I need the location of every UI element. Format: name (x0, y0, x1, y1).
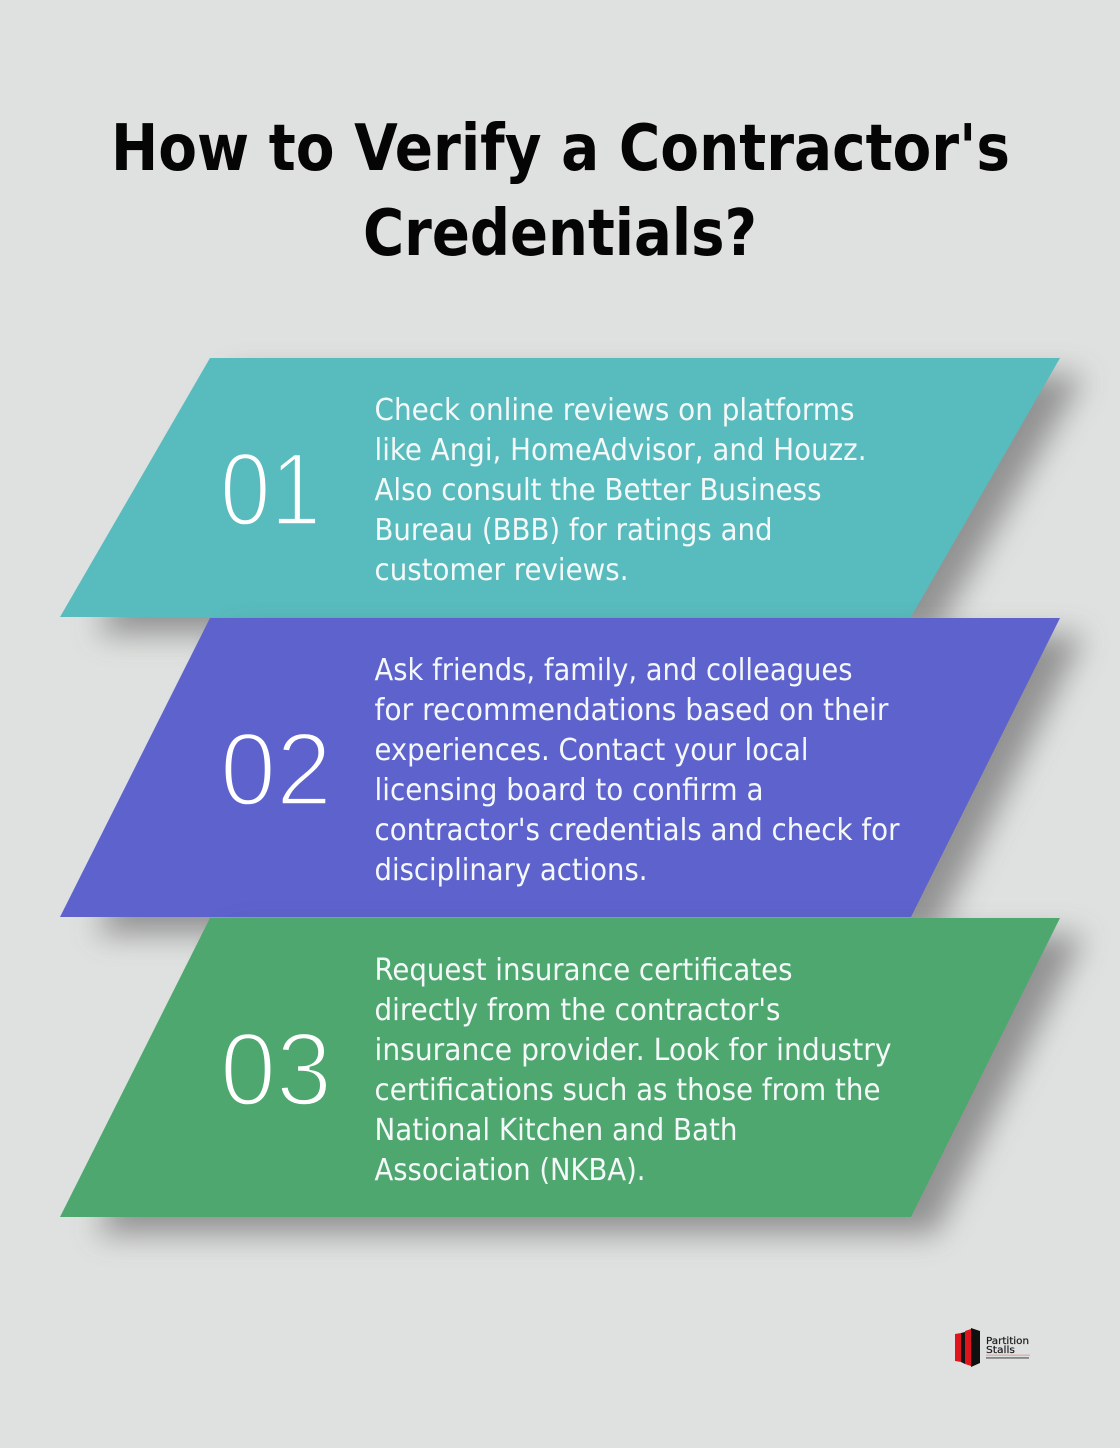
logo icon (955, 1328, 980, 1367)
step 02 text: Ask friends, family, and colleagues (374, 653, 852, 688)
logo wordmark: Partition (986, 1336, 1029, 1347)
title: Credentials? (363, 197, 757, 271)
step 03 text: directly from the contractor's (374, 993, 780, 1028)
step 02 text: experiences. Contact your local (374, 733, 808, 768)
step 01 text: Also consult the Better Business (374, 473, 822, 508)
logo wordmark (986, 1336, 1029, 1356)
step number 02: 02 (220, 712, 332, 828)
step 03 text: insurance provider. Look for industry (374, 1033, 892, 1068)
step 03 text: certifications such as those from the (374, 1073, 880, 1108)
title: How to Verify a Contractor's (111, 112, 1010, 186)
step 03 text: Request insurance certificates (374, 953, 792, 988)
step 03 text: National Kitchen and Bath (374, 1113, 738, 1148)
panel: step 02 (60, 618, 1084, 934)
step 02 text: contractor's credentials and check for (374, 813, 900, 848)
logo wordmark: Stalls (986, 1345, 1015, 1356)
title (111, 112, 1010, 271)
step 01 text: customer reviews. (374, 553, 628, 588)
step 03 text (374, 953, 892, 1188)
step 02 text: disciplinary actions. (374, 853, 648, 888)
step 01 text: Bureau (BBB) for ratings and (374, 513, 772, 548)
logo: Partition Stalls (955, 1328, 1030, 1367)
panel: step 03 (60, 918, 1084, 1234)
step 02 text: licensing board to confirm a (374, 773, 764, 808)
step 02 text (374, 653, 900, 888)
step 01 text (374, 393, 866, 588)
step 01 text: Check online reviews on platforms (374, 393, 854, 428)
step 03 text: Association (NKBA). (374, 1153, 646, 1188)
panel: step 01 (60, 358, 1084, 634)
step 02 text: for recommendations based on their (374, 693, 889, 728)
step number 03: 03 (220, 1012, 332, 1128)
step number 01: 01 (220, 432, 321, 548)
step 01 text: like Angi, HomeAdvisor, and Houzz. (374, 433, 866, 468)
